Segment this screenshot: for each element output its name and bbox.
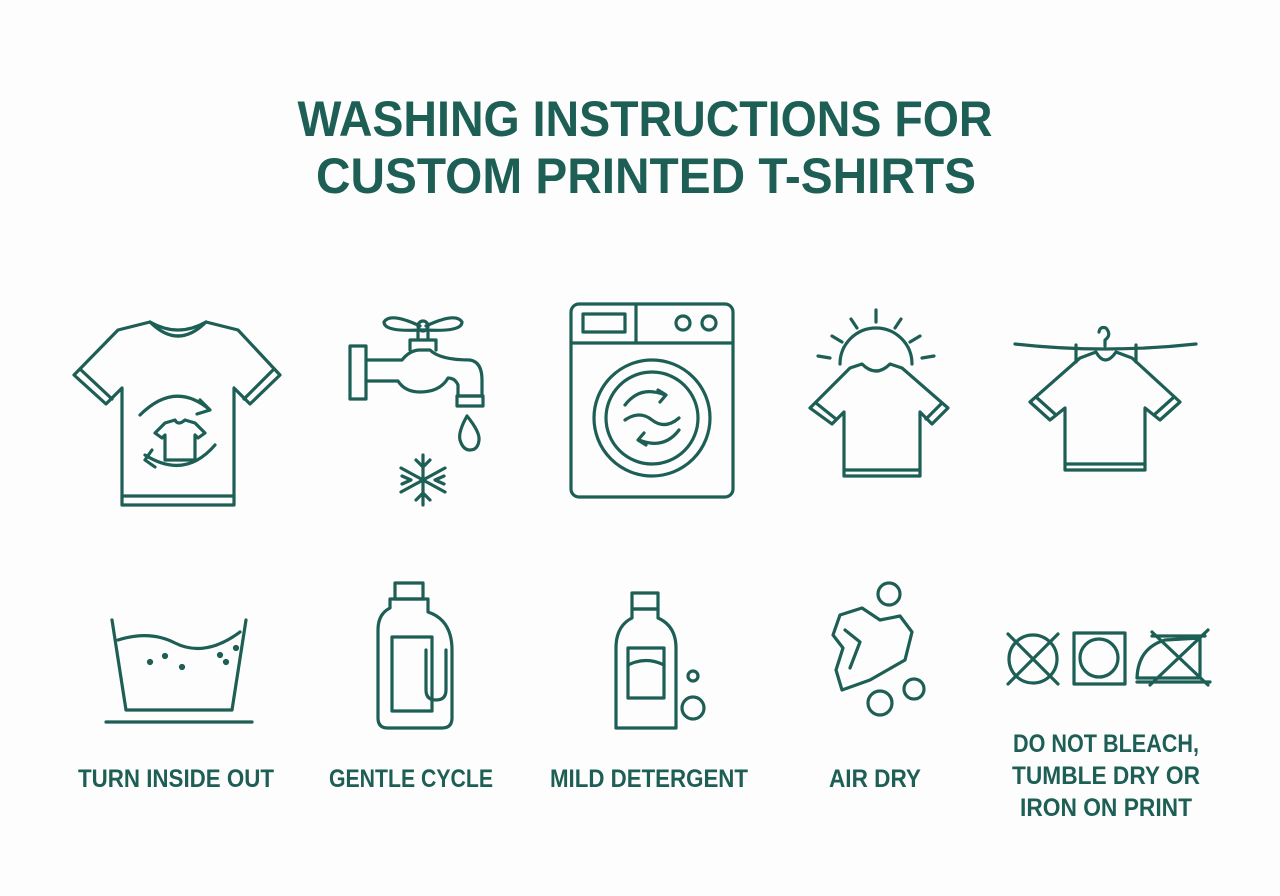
icon: mild detergent bottle — [616, 593, 704, 728]
labels: TUMBLE DRY OR — [1012, 762, 1200, 790]
title: WASHING INSTRUCTIONS FOR — [298, 91, 992, 147]
labels: DO NOT BLEACH, — [1013, 730, 1199, 758]
icon: cold tap — [350, 318, 483, 505]
labels: IRON ON PRINT — [1020, 794, 1192, 822]
icon: sun shirt — [810, 310, 948, 476]
labels: AIR DRY — [829, 765, 921, 793]
icon: washing machine — [571, 304, 733, 497]
labels: GENTLE CYCLE — [329, 765, 493, 793]
icon: prohibited care symbols — [1008, 630, 1210, 685]
icon: wash basin — [106, 620, 252, 722]
icon: air dry cloth — [833, 583, 924, 715]
icon: inside-out t-shirt — [74, 322, 280, 505]
title: CUSTOM PRINTED T-SHIRTS — [316, 148, 976, 204]
labels: TURN INSIDE OUT — [78, 765, 274, 793]
labels: MILD DETERGENT — [550, 765, 748, 793]
icon: detergent jug — [378, 583, 452, 728]
title — [298, 91, 992, 204]
icon: hanging shirt — [1015, 328, 1196, 470]
labels — [78, 730, 1200, 822]
